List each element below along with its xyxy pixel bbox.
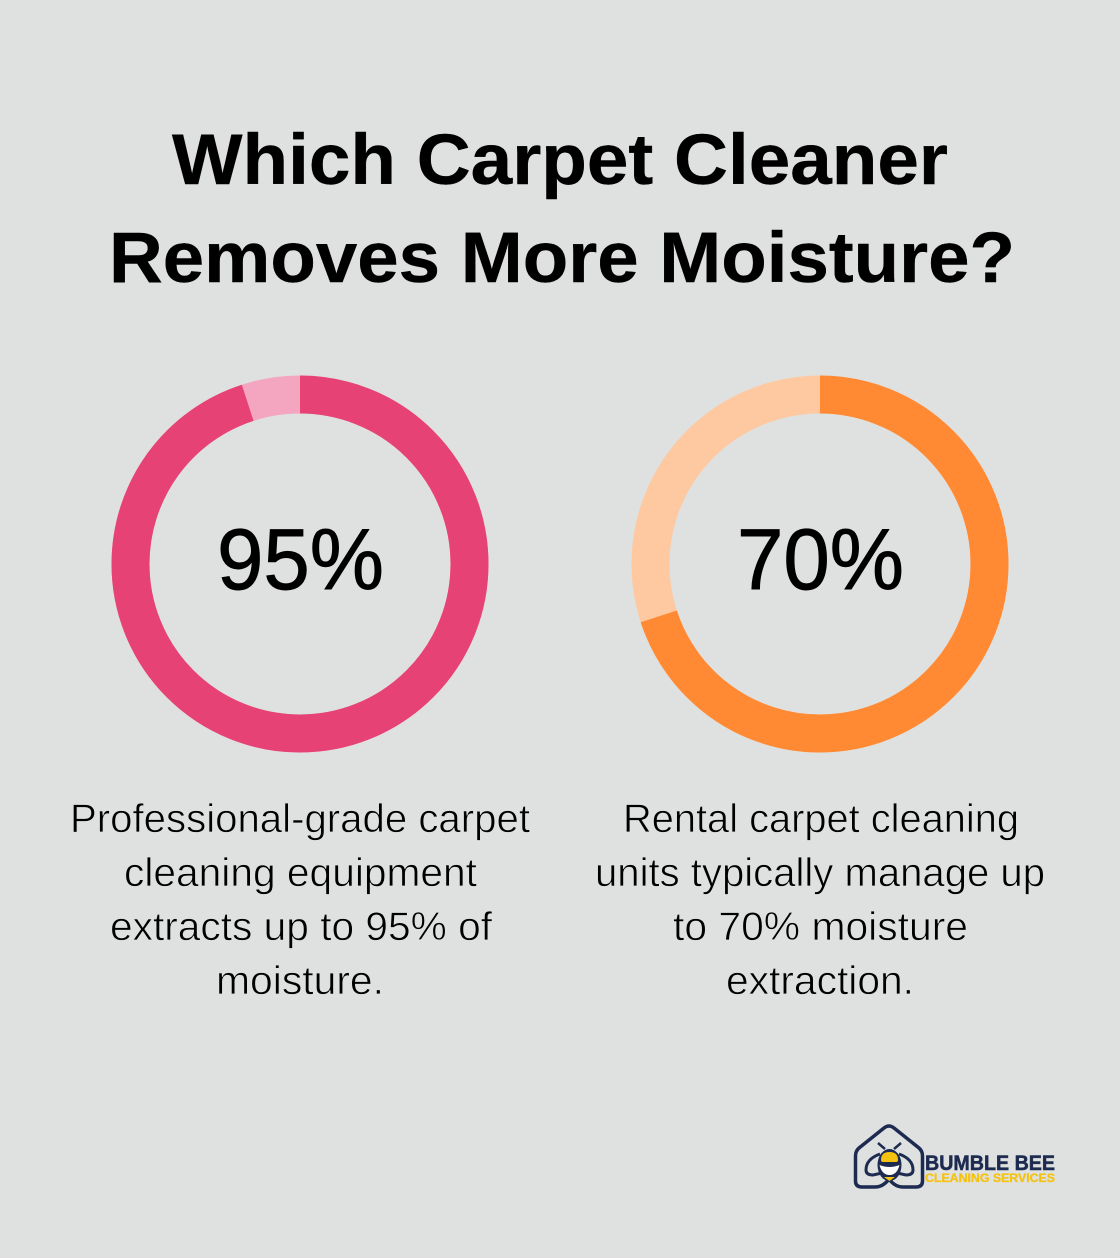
logo name: BUMBLE BEE: [925, 1152, 1055, 1175]
icon: house with bee: [856, 1126, 922, 1187]
donut chart: 95% professional: 95%: [217, 512, 384, 608]
text: rental description: Rental carpet cleaning: [623, 797, 1019, 841]
text: professional description: moisture.: [216, 959, 384, 1003]
text: rental description: [595, 797, 1045, 1003]
text: professional description: extracts up to 95% of: [110, 905, 493, 949]
title: [109, 121, 1015, 298]
text: rental description: units typically manage up: [595, 851, 1045, 895]
title: Which Carpet Cleaner: [172, 121, 948, 200]
text: professional description: [70, 797, 530, 1003]
title: Removes More Moisture?: [109, 219, 1015, 298]
logo: Bumble Bee Cleaning Services: [856, 1126, 1055, 1187]
donut chart: 95% professional: [130, 394, 470, 734]
logo tagline: CLEANING SERVICES: [925, 1171, 1055, 1185]
donut chart: 70% rental: 70%: [737, 512, 904, 608]
text: professional description: Professional-grade carpet: [70, 797, 530, 841]
donut chart: 70% rental: [650, 394, 990, 734]
text: rental description: to 70% moisture: [673, 905, 968, 949]
text: professional description: cleaning equipment: [124, 851, 477, 895]
text: rental description: extraction.: [726, 959, 914, 1003]
